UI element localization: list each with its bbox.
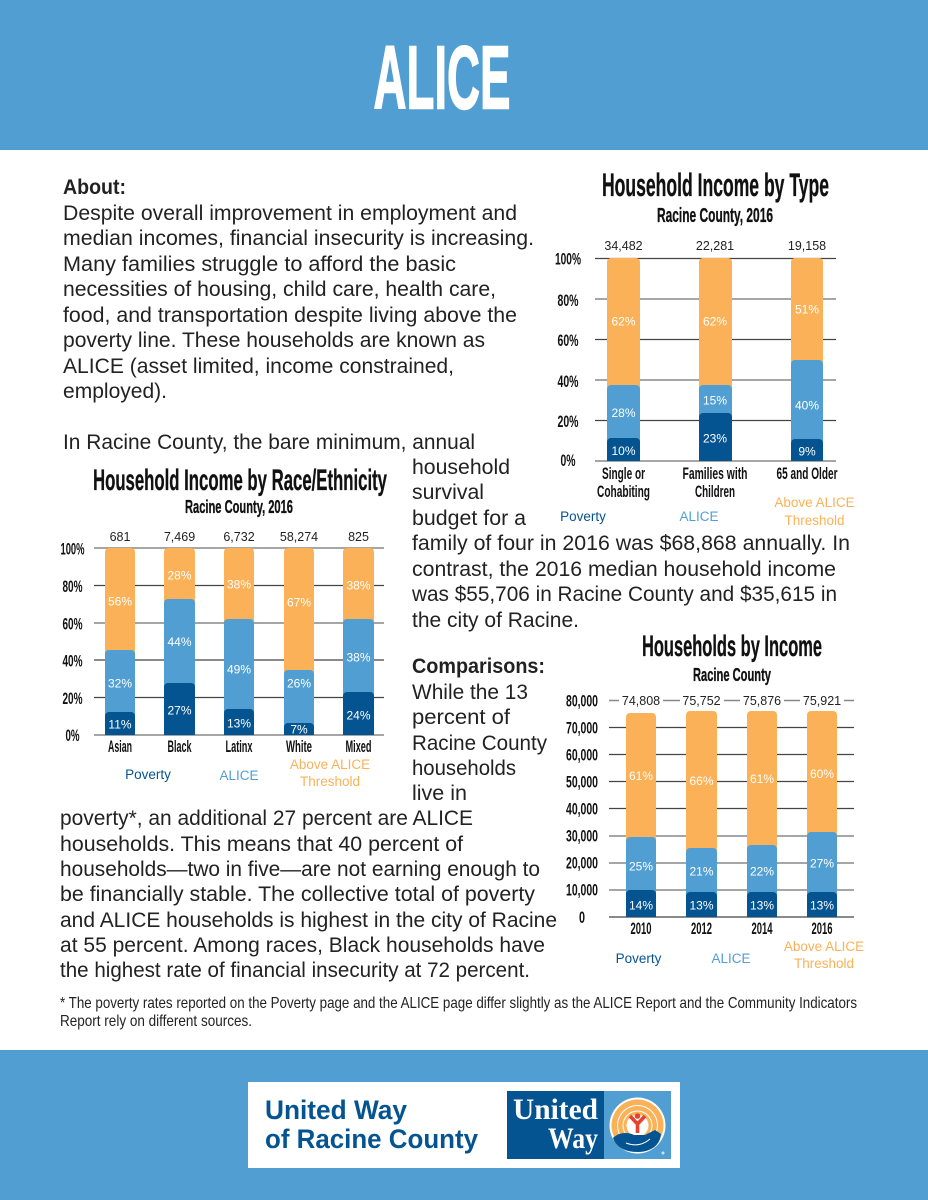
bar: Asian [105,530,135,756]
gridlines and y axis: 10,000 [566,880,598,900]
chart title: Household Income by Race/Ethnicity [93,464,387,497]
gridlines and y axis: 100% [555,250,581,268]
text block: about: necessities of housing, child care, health care, [63,278,496,301]
bar: 2010: 2010 [630,919,652,938]
bar: 2012: 2012 [691,919,712,938]
chart: household income by type [555,167,855,528]
legend: Above ALICE [290,757,370,772]
bar: Latinx: Latinx [226,737,253,756]
legend: ALICE [711,951,751,966]
bar: families with children: 23% [703,432,727,446]
text block: comparisons: the highest rate of financial insecurity at 72 percent. [60,959,530,982]
text block: comparisons: Comparisons: [412,655,545,678]
text block: comparisons: While the 13 [412,681,528,704]
bar: Mixed: Mixed [346,737,372,756]
text block: comparisons: be financially stable. The collective total of poverty [60,883,535,906]
text block: Racine County survival budget [63,431,850,632]
gridlines and y axis: 0% [66,726,80,745]
gridlines and y axis: 20,000 [566,854,598,872]
bar: single or cohabiting: 28% [611,406,636,420]
text block: about [63,176,534,403]
chart subtitle: Racine County [693,665,771,685]
chart: household income by race/ethnicity [60,464,387,789]
gridlines and y axis: 20% [558,412,578,431]
text block: Racine County survival budget: household [412,456,510,479]
bar: families with children: Families with [682,464,748,483]
bar: Asian: 11% [108,718,132,732]
bar: single or cohabiting: Cohabiting [597,482,650,501]
bar: single or cohabiting: 34,482 [604,239,643,253]
bar: Asian: 56% [108,594,132,608]
bar: 2012: 21% [689,864,714,878]
legend: Threshold [794,956,854,971]
gridlines and y axis: 60% [558,331,578,350]
bar: families with children: 62% [703,314,727,328]
bar: single or cohabiting: Single or [602,464,645,483]
gridlines and y axis: 80,000 [566,692,598,710]
bar: 2010: 14% [629,898,653,912]
text block: Racine County survival budget: the city of Racine. [412,609,579,632]
gridlines and y axis: 40,000 [566,800,598,818]
United Way badge: United [513,1093,598,1126]
United Way badge [507,1091,671,1159]
bar: 2010 [619,693,663,938]
bar: Black: 44% [167,635,192,649]
bar: Black: 28% [167,568,192,582]
text block: Racine County survival budget: was $55,706 in Racine County and $35,615 in [411,583,837,606]
bar: Asian: Asian [108,737,132,756]
bar: single or cohabiting [597,239,650,501]
bar: 2016: 75,921 [803,694,841,708]
bar: 65 and older: 65 and Older [776,464,838,483]
logo wordmark [265,1095,478,1154]
bar: single or cohabiting: 62% [611,314,636,328]
bar: 2014: 75,876 [743,694,781,708]
gridlines and y axis: 60% [62,614,82,634]
text block: about: About: [63,176,126,199]
bar: Black [164,530,195,756]
bar: single or cohabiting: 10% [611,444,636,458]
bar: 2010: 74,808 [622,694,660,708]
bar: Mixed: 825 [348,530,369,544]
bar: Black: Black [168,737,192,756]
gridlines and y axis: 0 [579,908,585,927]
bar: families with children: 22,281 [696,239,734,253]
bar: 2014: 2014 [752,919,773,938]
bar: White: 7% [290,722,308,736]
text block: comparisons: households. This means that 40 percent of [60,833,463,856]
bar: White: White [286,737,312,756]
logo wordmark: United Way [265,1095,407,1125]
bar: 2012: 13% [689,898,714,912]
gridlines and y axis [566,692,854,927]
bar: 2016: 60% [810,767,834,781]
legend [125,757,370,789]
text block: about: ALICE (asset limited, income constrained, [63,355,454,378]
gridlines and y axis: 20% [62,689,82,708]
text block: comparisons: and ALICE households is highest in the city of Racine [60,909,557,932]
bar: 2014: 13% [750,898,774,912]
text block: about: Many families struggle to afford the basic [63,253,456,276]
bar: 2016: 27% [810,856,834,870]
text block: about: poverty line. These households are known as [63,329,485,352]
text block: comparisons: households [412,757,516,780]
bar: 2010: 61% [629,769,653,783]
bar: 2014 [740,693,784,938]
bar: families with children: 15% [703,394,727,408]
United Way badge: Way [548,1122,598,1155]
legend: Threshold [300,774,360,789]
bar: 2016 [800,693,844,938]
bar: Latinx: 6,732 [223,530,255,544]
bar: Asian: 32% [108,676,132,690]
text block: comparisons [60,655,557,982]
bar: 2014: 61% [750,772,774,786]
gridlines and y axis: 50,000 [566,772,598,792]
text block: comparisons: Racine County [412,732,547,755]
legend: Above ALICE [784,939,864,954]
legend [560,495,855,528]
bar: Mixed: 38% [346,578,371,592]
bar: 2012: 75,752 [682,694,721,708]
bar: White [280,530,318,756]
gridlines and y axis: 40% [62,652,82,670]
bar: Mixed [343,530,374,756]
gridlines and y axis: 70,000 [566,718,598,738]
bar: Latinx [223,530,255,756]
chart subtitle: Racine County, 2016 [657,205,773,227]
bar: families with children: Children [695,482,735,501]
bar: 65 and older: 51% [795,302,819,316]
legend: ALICE [219,768,259,783]
text block: about: median incomes, financial insecurity is increasing. [63,227,534,250]
gridlines and y axis: 80% [62,577,82,596]
bar: 65 and older: 40% [795,398,819,412]
bar: 65 and older [776,239,838,483]
legend: Poverty [560,509,606,524]
text block: about: Despite overall improvement in employment and [63,202,517,225]
bar: 2012: 66% [689,774,714,788]
bar: Latinx: 49% [227,662,251,676]
bar: Latinx: 13% [227,716,251,730]
bar: White: 26% [287,676,311,690]
text block: comparisons: poverty*, an additional 27 percent are ALICE [60,807,473,830]
chart subtitle: Racine County, 2016 [185,497,293,517]
bar: 65 and older: 9% [798,444,816,458]
bar: families with children [682,239,748,501]
text block: Racine County survival budget: contrast, the 2016 median household income [412,558,836,581]
bar: 2016: 13% [810,898,834,912]
bar: Latinx: 38% [227,578,251,592]
bar: Mixed: 24% [346,708,371,722]
gridlines and y axis: 100% [60,540,84,558]
bar: White: 58,274 [280,530,318,544]
text block: comparisons: at 55 percent. Among races, Black households have [60,934,545,957]
title: ALICE [374,28,510,128]
legend: ALICE [679,509,719,524]
gridlines and y axis: 0% [560,451,576,470]
text block: comparisons: households—two in five—are not earning enough to [60,858,540,881]
bar: 2016: 2016 [812,919,832,938]
icon: helping hand and rainbow [610,1098,666,1154]
gridlines and y axis [60,540,384,745]
gridlines and y axis: 30,000 [566,826,598,846]
legend: Threshold [784,513,845,528]
text block: comparisons: live in [412,782,467,805]
text block: Racine County survival budget: family of four in 2016 was $68,868 annually. In [412,532,850,555]
bar: 2010: 25% [629,860,653,874]
text block: Racine County survival budget: budget for a [412,507,526,530]
text block: comparisons: percent of [412,706,510,729]
bar: White: 67% [287,596,311,610]
bar: 65 and older: 19,158 [788,239,826,253]
footnote: Report rely on different sources. [60,1013,252,1030]
text block: about: food, and transportation despite living above the [63,304,517,327]
footnote [60,995,857,1030]
text block: Racine County survival budget: survival [412,481,484,504]
bar: Asian: 681 [110,530,130,544]
legend: Poverty [616,951,662,966]
header banner [0,0,928,150]
gridlines and y axis: 40% [558,372,578,391]
bar: Mixed: 38% [346,650,371,664]
footer banner [0,1050,928,1200]
gridlines and y axis [555,250,836,470]
logo panel [248,1082,680,1168]
chart: households by income [566,630,864,971]
bar: 2012 [680,693,724,938]
bar: Black: 27% [167,704,192,718]
legend: Poverty [125,767,171,782]
gridlines and y axis: 60,000 [566,746,598,764]
text block: Racine County survival budget: In Racine County, the bare minimum, annual [63,431,475,454]
legend [616,939,864,971]
legend: Above ALICE [774,495,855,510]
bar: 2014: 22% [750,864,774,878]
logo wordmark: of Racine County [265,1124,478,1154]
gridlines and y axis: 80% [558,291,578,310]
bar: Black: 7,469 [164,530,195,544]
text block: about: employed). [63,380,167,403]
